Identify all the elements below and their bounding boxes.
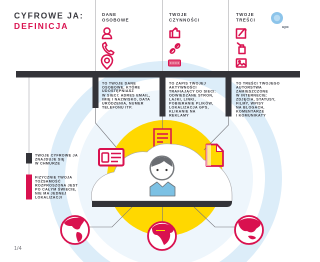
text: dane osobowe: W SIECI: ADRES EMAIL, bbox=[102, 93, 150, 97]
text: dane osobowe: TELEFONU ITP. bbox=[102, 105, 133, 109]
vertical column lines bbox=[29, 0, 228, 175]
heading: twoje treści: TREŚCI bbox=[236, 18, 255, 22]
text: cloud note: ZNAJDUJE SIĘ bbox=[35, 158, 65, 162]
text: twoje czynności: TRAFIAJĄCY DO SIECI: bbox=[169, 90, 216, 94]
icon: globe americas bbox=[61, 216, 89, 244]
text: twoje treści: NA BLOGACH, bbox=[236, 106, 265, 110]
text: dispersed note bbox=[35, 176, 78, 200]
text: twoje czynności: REKLAMY bbox=[169, 114, 189, 118]
cloud bbox=[91, 144, 232, 207]
text: twoje treści: TO TREŚCI TWOJEGO bbox=[236, 80, 280, 86]
title bbox=[14, 10, 84, 31]
heading: dane osobowe bbox=[102, 12, 129, 22]
text: dispersed note: NIE MA JEDNEJ bbox=[35, 192, 67, 196]
text: dane osobowe: URODZENIA, NUMER bbox=[102, 101, 144, 105]
heading: dane osobowe: DANE bbox=[102, 12, 117, 17]
title: DEFINICJA bbox=[14, 21, 69, 31]
text: dispersed note: ROZPROSZONA JEST bbox=[35, 184, 78, 188]
icon: file bbox=[206, 144, 223, 166]
heading: dane osobowe: OSOBOWE bbox=[102, 18, 129, 22]
marker: cloud note bbox=[26, 153, 32, 164]
text: twoje treści: ZAMIESZCZONE bbox=[236, 90, 268, 94]
text: twoje czynności: ODWIEDZANE STRON, bbox=[169, 94, 214, 98]
marker: dispersed note bbox=[26, 174, 32, 200]
page number: 1/4 bbox=[14, 246, 22, 252]
text: twoje czynności bbox=[169, 82, 216, 118]
text: dispersed note: PO CAŁYM ŚWIECIE, bbox=[35, 186, 77, 192]
icon: document behind cloud bbox=[154, 129, 171, 153]
text: dispersed note: TOŻSAMOŚĆ bbox=[35, 178, 61, 184]
text: twoje treści bbox=[236, 80, 280, 118]
icon: phone bbox=[103, 42, 114, 55]
text: twoje czynności: LAJKI, LINKI, bbox=[169, 98, 196, 102]
title: CYFROWE JA: bbox=[14, 10, 84, 20]
icon: keyboard bbox=[168, 60, 180, 66]
text: twoje czynności: KLIKANIE NA bbox=[169, 110, 196, 114]
person avatar bbox=[150, 156, 175, 196]
text: dane osobowe: TO TWOJE DANE bbox=[102, 82, 136, 86]
heading: twoje treści bbox=[236, 12, 255, 22]
text: twoje treści: FILMY, WPISY bbox=[236, 102, 264, 106]
text: dispersed note: FIZYCZNIE TWOJA bbox=[35, 176, 72, 180]
text: twoje treści: ZDJĘCIA, STATUSY, bbox=[236, 98, 276, 102]
icon: globe asia bbox=[235, 216, 263, 244]
heading: twoje czynności bbox=[169, 12, 200, 22]
icon: edit note bbox=[236, 29, 246, 38]
text: twoje czynności: LOKALIZACJA GPS, bbox=[169, 106, 209, 110]
background: concentric circles bbox=[48, 61, 282, 262]
icon: image bbox=[236, 59, 246, 67]
text: twoje czynności: AKTYWNOŚCI bbox=[169, 84, 197, 90]
icon: globe africa bbox=[148, 222, 176, 250]
text: twoje czynności: TO ZAPIS TWOJEJ bbox=[169, 82, 206, 86]
heading: twoje czynności: TWOJE bbox=[169, 12, 187, 17]
text: dane osobowe bbox=[102, 82, 150, 109]
heading: twoje treści: TWOJE bbox=[236, 12, 254, 17]
top horizontal bar with stubs bbox=[16, 71, 300, 116]
icon: thumbs up bbox=[170, 28, 180, 38]
text: cloud note bbox=[35, 154, 78, 166]
text: cloud note: W CHMURZE bbox=[35, 162, 61, 166]
icon: id card bbox=[99, 149, 124, 166]
connector lines to cloud and globes bbox=[78, 108, 250, 227]
icon: chain link bbox=[169, 43, 181, 54]
logo: upc bbox=[271, 12, 289, 29]
text: twoje treści: W INTERNECIE: bbox=[236, 94, 268, 98]
icon: person bbox=[102, 28, 112, 38]
heading: twoje czynności: CZYNNOŚCI bbox=[169, 18, 200, 22]
icon: map pin bbox=[102, 55, 112, 69]
text: dane osobowe: IMIĘ I NAZWISKO, DATA bbox=[102, 97, 150, 101]
logo: upc: upc bbox=[282, 25, 289, 29]
text: dane osobowe: OSOBOWE, KTÓRE bbox=[102, 84, 141, 89]
text: twoje treści: KOMENTARZE bbox=[236, 110, 265, 114]
text: dispersed note: LOKALIZACJI bbox=[35, 196, 62, 200]
text: twoje treści: AUTORSTWA bbox=[236, 86, 262, 90]
text: twoje treści: I KOMUNIKATY bbox=[236, 114, 266, 118]
text: twoje czynności: POBIERANIE PLIKÓW, bbox=[169, 100, 213, 106]
icon: spray bottle bbox=[238, 43, 245, 54]
text: cloud note: TWOJE CYFROWE JA bbox=[35, 154, 78, 158]
text: dane osobowe: UDOSTĘPNIASZ bbox=[102, 89, 134, 93]
